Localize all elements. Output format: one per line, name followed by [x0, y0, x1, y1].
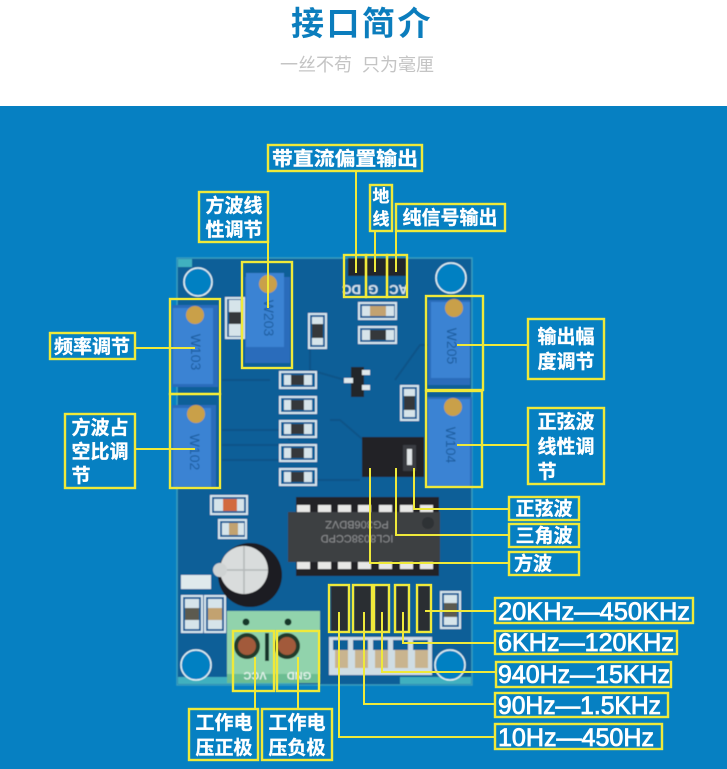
label: output amplitude adjust: [528, 319, 604, 379]
label: square wave linear adjust: [199, 192, 268, 242]
output header: AC G DC: [342, 282, 408, 297]
label: output amplitude adjust: 输出幅: [537, 325, 595, 348]
screw terminal: [227, 611, 320, 683]
label: square wave linear adjust: 方波线: [205, 194, 263, 217]
label: positive supply: [189, 709, 258, 760]
traces: [222, 320, 430, 480]
label: dc offset output: 带直流偏置输出: [272, 147, 418, 170]
label: square duty adjust: 空比调: [71, 440, 129, 463]
output header: [342, 258, 408, 297]
label: 20KHz range: 20KHz—450KHz: [498, 598, 690, 626]
label: 6KHz range: 6KHz—120KHz: [498, 629, 674, 657]
potentiometer W102: W102: [187, 434, 203, 470]
ic chip: ICL8038CCPD: [321, 532, 393, 544]
ic chip: PG306BDVZ: [325, 518, 389, 530]
label: square duty adjust: [65, 414, 135, 488]
label: triangle wave: 三角波: [515, 524, 573, 547]
label: square wave linear adjust: 性调节: [205, 219, 263, 241]
label: pure signal output: [396, 204, 505, 231]
label: 90Hz range: 90Hz—1.5KHz: [498, 692, 661, 720]
label: sine linear adjust: 节: [537, 461, 557, 483]
label: frequency adjust: 频率调节: [54, 336, 130, 358]
transistor Q1: [344, 367, 370, 397]
potentiometer W203: W203: [261, 300, 277, 336]
label: negative supply: 压负极: [268, 737, 326, 759]
label: output amplitude adjust: 度调节: [537, 350, 595, 373]
electrolytic capacitor: [213, 543, 282, 607]
label: positive supply: 压正极: [195, 737, 253, 759]
label: sine linear adjust: 正弦波: [537, 411, 595, 433]
potentiometer W203: [245, 273, 290, 363]
header background: [0, 0, 727, 106]
potentiometer W104: W104: [443, 427, 459, 463]
p3 jumpers: [331, 586, 430, 631]
label: sine linear adjust: 线性调: [537, 436, 595, 458]
board corner highlights: [178, 259, 471, 684]
screw terminal: VCC: [243, 669, 267, 681]
frequency capacitors: [329, 637, 432, 675]
potentiometer W205: W205: [444, 328, 460, 364]
p2 jumper block: [362, 437, 424, 477]
label: sine linear adjust: [528, 408, 604, 484]
label: sine wave: 正弦波: [515, 498, 573, 520]
potentiometer W205: [428, 299, 470, 385]
label: square wave: [509, 552, 579, 575]
label: ground: [370, 185, 392, 231]
smd resistors: [181, 298, 460, 632]
label: square wave: 方波: [514, 552, 552, 575]
label: negative supply: 工作电: [268, 712, 326, 734]
label: ground: 地: [372, 187, 390, 206]
component highlight boxes: [170, 255, 483, 691]
title: 接口简介: [291, 5, 433, 42]
ic chip: [288, 497, 440, 576]
circuit board: [172, 258, 472, 685]
leader lines: [135, 171, 528, 737]
label: square duty adjust: 节: [71, 465, 91, 487]
label: positive supply: 工作电: [195, 712, 253, 734]
potentiometer W104: [427, 397, 472, 487]
screw terminal: GND: [287, 669, 311, 681]
label: square duty adjust: 方波占: [71, 416, 129, 439]
label: ground: 线: [372, 210, 390, 229]
potentiometer W103: W103: [188, 334, 204, 370]
label: pure signal output: 纯信号输出: [402, 206, 498, 229]
subtitle: 一丝不苟 只为毫厘: [280, 55, 434, 75]
label: negative supply: [262, 709, 332, 760]
label: 940Hz range: 940Hz—15KHz: [498, 661, 670, 689]
label: 10Hz range: 10Hz—450Hz: [498, 724, 654, 752]
potentiometer W103: [172, 305, 218, 387]
label: dc offset output: [268, 145, 422, 171]
mounting holes: [181, 263, 466, 680]
potentiometer W102: [172, 405, 216, 487]
